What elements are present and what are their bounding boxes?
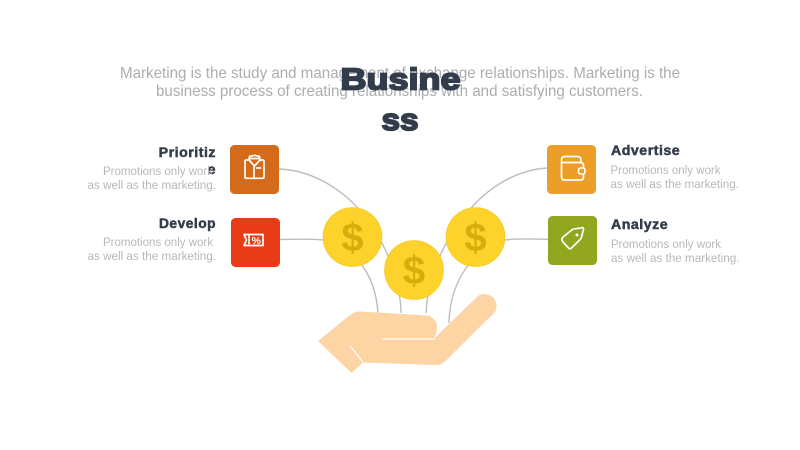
panel: Advertise bbox=[547, 143, 739, 194]
coin: centre bbox=[384, 240, 444, 300]
title bbox=[340, 62, 460, 137]
panel: Prioritize bbox=[88, 145, 279, 194]
text: Analyze description: as well as the marketing. bbox=[611, 251, 740, 265]
intro paragraph: Marketing is the study and management of exchange relationships. Marketing is the bbox=[120, 65, 680, 82]
text: Prioritize description: as well as the marketing. bbox=[88, 178, 216, 192]
intro paragraph: business process of creating relationships with and satisfying customers. bbox=[156, 83, 643, 100]
icon: wallet bbox=[547, 145, 596, 194]
text: Analyze description: Promotions only work bbox=[611, 237, 722, 251]
coin: centre: $ bbox=[403, 249, 425, 293]
text: Develop description: as well as the marketing. bbox=[88, 249, 216, 263]
text: Prioritize description: Promotions only work bbox=[103, 164, 214, 178]
title: Busine bbox=[340, 62, 460, 96]
heading: Prioritize: e bbox=[208, 162, 216, 178]
coin: right bbox=[446, 208, 505, 266]
coin: right: $ bbox=[464, 216, 487, 260]
heading: Analyze: Analyze bbox=[611, 217, 668, 233]
text: Advertise description: as well as the marketing. bbox=[610, 177, 739, 191]
icon: coupon bbox=[231, 218, 280, 267]
icon: open hand bbox=[318, 294, 497, 373]
connector lines bbox=[279, 168, 548, 323]
text: Develop description bbox=[88, 235, 216, 263]
text: Advertise description bbox=[610, 163, 739, 191]
panel: Develop bbox=[88, 216, 280, 267]
text: Develop description: Promotions only work bbox=[103, 235, 214, 249]
icon: coupon: % bbox=[252, 235, 262, 247]
heading: Develop: Develop bbox=[159, 216, 216, 232]
icon: shirt bbox=[230, 145, 279, 194]
coin: left: $ bbox=[341, 216, 364, 260]
heading: Advertise: Advertise bbox=[611, 143, 680, 159]
panel: Analyze bbox=[548, 216, 740, 265]
coin: left bbox=[323, 208, 382, 266]
heading: Prioritize bbox=[159, 145, 216, 178]
icon: price tag bbox=[548, 216, 597, 265]
text: Advertise description: Promotions only work bbox=[610, 163, 721, 177]
title: ss bbox=[382, 102, 418, 137]
intro paragraph bbox=[120, 65, 680, 100]
text: Prioritize description bbox=[88, 164, 216, 192]
heading: Prioritize: Prioritiz bbox=[159, 145, 216, 161]
text: Analyze description bbox=[611, 237, 740, 265]
